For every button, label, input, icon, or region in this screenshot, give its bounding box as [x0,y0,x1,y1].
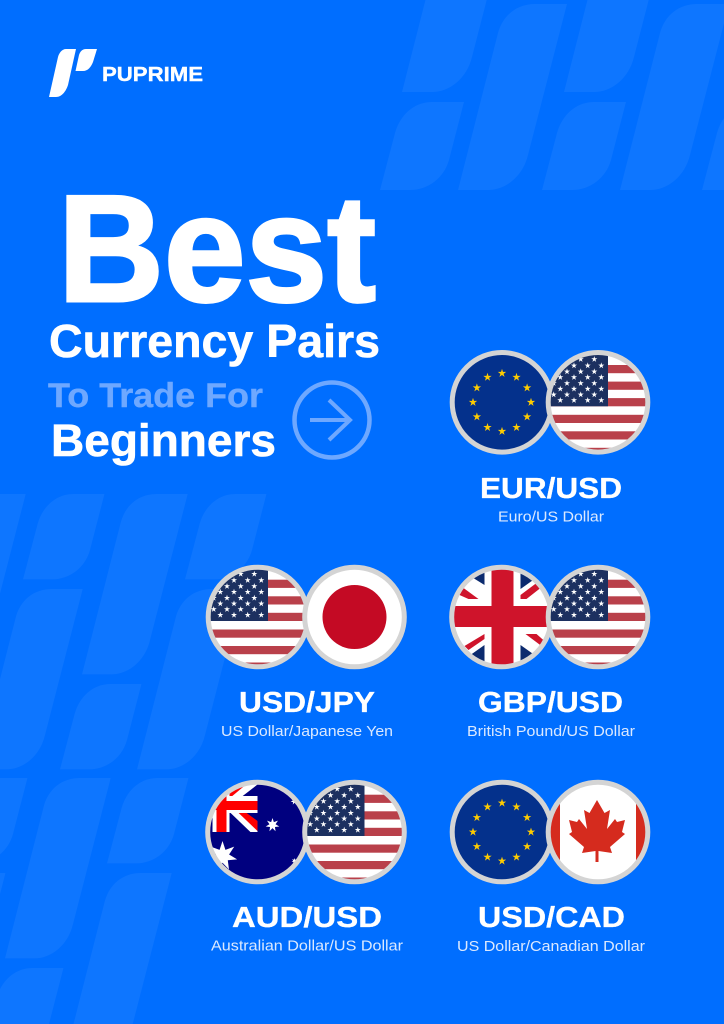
title [48,164,380,466]
flags: EU and Canada [452,782,648,882]
pair name: US Dollar/Japanese Yen [221,724,393,740]
pair code: USD/JPY [239,687,375,719]
pair: USD/JPY [208,567,404,740]
pair name: Euro/US Dollar [498,510,604,526]
pair: EUR/USD [452,352,648,526]
logo wordmark: PUPRIME [102,63,203,86]
icon: logo mark [49,49,97,97]
pair code: EUR/USD [480,473,622,505]
heading: Beginners: Beginners [51,415,276,466]
logo [49,49,203,97]
pair: USD/CAD [452,782,648,955]
pair code: USD/CAD [478,902,625,934]
pair: GBP/USD [440,557,648,740]
pair name: Australian Dollar/US Dollar [211,938,403,954]
icon: arrow in circle [294,382,370,458]
flags: EU and US [452,352,648,456]
heading: To Trade For: To Trade For [48,377,263,415]
flags: UK and US [449,564,650,670]
pair code: GBP/USD [478,687,623,719]
pair name: British Pound/US Dollar [467,724,635,740]
pair: AUD/USD [208,780,404,954]
heading: Currency Pairs: Currency Pairs [49,315,380,367]
pair code: AUD/USD [232,902,382,934]
flags: US and Japan [208,567,404,670]
flags: Australia and US [208,780,404,886]
heading: Best: Best [58,164,376,334]
pair name: US Dollar/Canadian Dollar [457,939,645,955]
